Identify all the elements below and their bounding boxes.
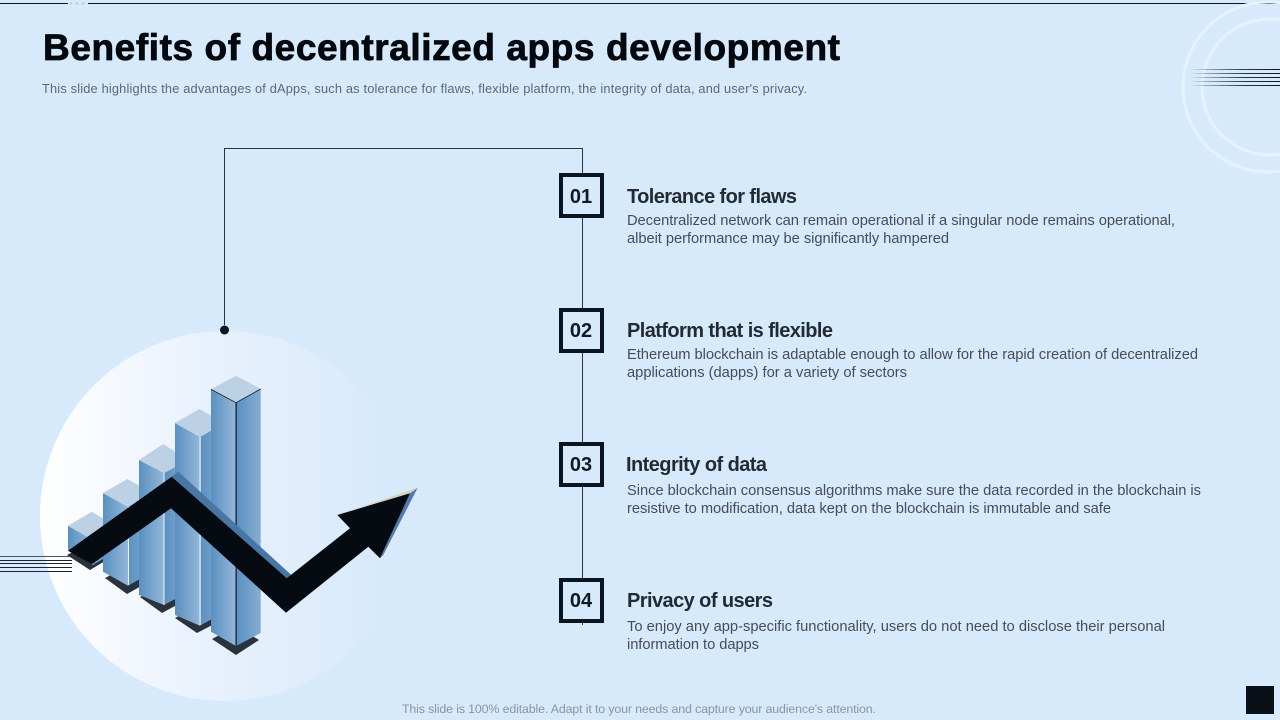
body 02: applications (dapps) for a variety of sectors [627, 365, 907, 381]
arrow blue side [172, 472, 293, 582]
bar shadows [67, 544, 259, 655]
decorative corner stripes [1190, 69, 1280, 86]
heading 01: Tolerance for flaws [627, 186, 797, 208]
heading 03: Integrity of data [626, 454, 768, 476]
number box 01 [561, 175, 602, 216]
corner square [1246, 686, 1274, 714]
body 03 [627, 483, 1201, 517]
title: Benefits of decentralized apps development [43, 27, 840, 68]
heading 04: Privacy of users [627, 590, 773, 612]
body 03: Since blockchain consensus algorithms make sure the data recorded in the blockchain is [627, 483, 1201, 499]
item 02 [561, 310, 1198, 381]
heading 02: Platform that is flexible [627, 320, 833, 342]
body 04 [627, 619, 1165, 653]
bar 2 [103, 479, 152, 586]
bar 3 [139, 444, 188, 605]
subtitle: This slide highlights the advantages of dApps, such as tolerance for flaws, flexible platform, the integrity of data, and user's privacy. [42, 81, 807, 96]
bar chart with arrow [67, 376, 418, 655]
number box 01: 01 [570, 186, 592, 208]
left stripes [0, 556, 72, 572]
body 01: albeit performance may be significantly hampered [627, 231, 949, 247]
number box 02: 02 [570, 320, 592, 342]
bar 1 [68, 512, 116, 565]
number box 04: 04 [570, 590, 593, 612]
body 01: Decentralized network can remain operational if a singular node remains operational, [627, 213, 1175, 229]
bar 4 [175, 409, 224, 626]
arrow [68, 477, 410, 613]
number box 04 [561, 580, 602, 621]
arrow head side [380, 488, 418, 558]
gradient circle [40, 331, 410, 701]
item 03 [561, 444, 1201, 517]
body 04: information to dapps [627, 637, 759, 653]
decorative corner rings [1183, 2, 1280, 172]
footer note: This slide is 100% editable. Adapt it to your needs and capture your audience's attention. [402, 702, 876, 716]
number box 03: 03 [570, 454, 592, 476]
arrow head top edge [337, 488, 418, 515]
body 02 [627, 347, 1198, 381]
body 03: resistive to modification, data kept on the blockchain is immutable and safe [627, 501, 1111, 517]
connector dot [220, 326, 229, 334]
connector line [224, 148, 582, 625]
body 04: To enjoy any app-specific functionality, users do not need to disclose their personal [627, 619, 1165, 635]
number box 02 [561, 310, 602, 351]
bar 5 [211, 376, 261, 646]
top rule [0, 2, 1280, 5]
number box 03 [561, 444, 602, 485]
item 01 [561, 175, 1175, 247]
body 01 [627, 213, 1175, 247]
body 02: Ethereum blockchain is adaptable enough to allow for the rapid creation of decentralized [627, 347, 1198, 363]
item 04 [561, 580, 1165, 653]
